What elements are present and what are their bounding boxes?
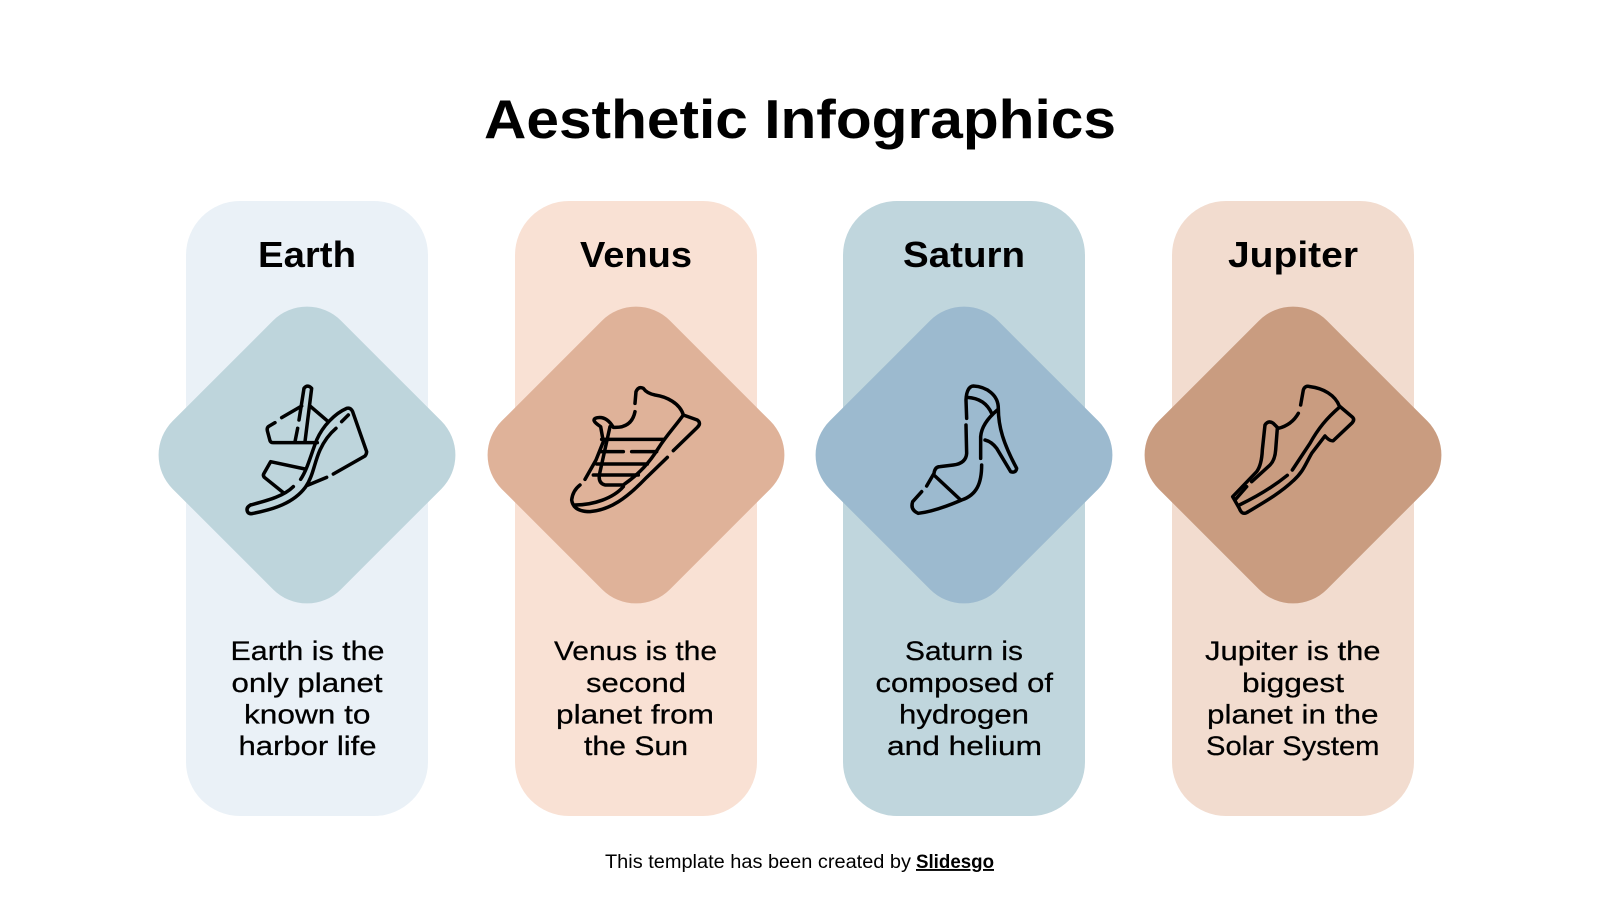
- description: Earth: Earth is the: [230, 636, 384, 666]
- title: Aesthetic Infographics: [484, 88, 1116, 150]
- panel: Saturn: [796, 201, 1132, 816]
- description: Jupiter: Solar System: [1206, 731, 1380, 761]
- description: Saturn: and helium: [887, 731, 1042, 761]
- footer credit: This template has been created by: [605, 852, 912, 873]
- panel: Jupiter: [1125, 201, 1461, 816]
- description: Jupiter: biggest: [1242, 668, 1345, 698]
- diamond: Venus: [468, 287, 804, 623]
- description: Venus: second: [586, 668, 686, 698]
- heading: Jupiter: Jupiter: [1228, 234, 1358, 275]
- description: Venus: the Sun: [584, 731, 688, 761]
- panel: Earth: [139, 201, 475, 816]
- heading: Earth: Earth: [258, 234, 356, 275]
- description: Earth: only planet: [232, 668, 383, 698]
- description: Venus: [554, 636, 717, 761]
- description: Saturn: Saturn is: [905, 636, 1023, 666]
- description: Earth: [230, 636, 384, 761]
- description: Venus: Venus is the: [554, 636, 717, 666]
- panel: Venus: [468, 201, 804, 816]
- icon: sneaker: [572, 388, 699, 512]
- description: Jupiter: planet in the: [1207, 700, 1378, 730]
- description: Saturn: [876, 636, 1054, 761]
- description: Earth: known to: [244, 700, 370, 730]
- diamond: Earth: [139, 287, 475, 623]
- heading: Saturn: Saturn: [903, 234, 1025, 275]
- description: Saturn: composed of: [876, 668, 1054, 698]
- icon: high heel: [912, 386, 1017, 513]
- description: Saturn: hydrogen: [899, 700, 1029, 730]
- description: Jupiter: [1205, 636, 1380, 761]
- description: Earth: harbor life: [238, 731, 376, 761]
- description: Venus: planet from: [556, 700, 714, 730]
- footer credit: Slidesgo: [916, 852, 994, 873]
- icon: oxford shoe: [1233, 386, 1354, 513]
- diamond: Jupiter: [1125, 287, 1461, 623]
- icon: wedge sandal: [247, 386, 367, 514]
- diamond: Saturn: [796, 287, 1132, 623]
- description: Jupiter: Jupiter is the: [1205, 636, 1380, 666]
- heading: Venus: Venus: [580, 234, 692, 275]
